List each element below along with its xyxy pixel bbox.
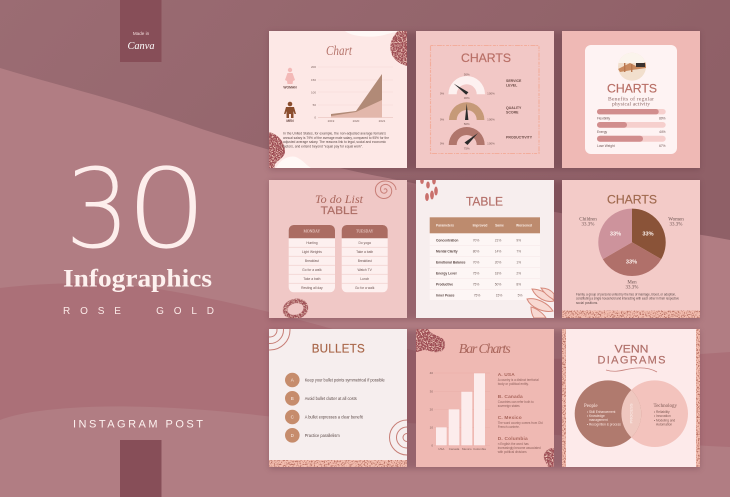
squiggle bbox=[606, 368, 657, 372]
bar chart: 40 bbox=[430, 371, 433, 375]
top ribbon bbox=[120, 0, 162, 62]
white corner bottom bbox=[276, 157, 311, 168]
glitter side right bbox=[696, 329, 700, 467]
bar: flexibility: Flexibility bbox=[597, 116, 611, 120]
paragraph: factors, and extend beyond "equal pay for equal work". bbox=[283, 144, 363, 148]
gauge: service level: 30% bbox=[464, 96, 470, 100]
table: Worsened bbox=[516, 224, 532, 228]
bar: energy: 44% bbox=[659, 130, 666, 134]
paragraph bbox=[283, 132, 389, 148]
table: 8% bbox=[516, 282, 521, 286]
paragraph: constituting a single household and interacting with each other in their respective bbox=[576, 297, 679, 301]
title: Chart bbox=[326, 44, 353, 59]
icon: man bbox=[284, 102, 296, 118]
bar chart: 30 bbox=[430, 389, 433, 393]
bullet B bbox=[285, 391, 357, 406]
big number 30 bbox=[65, 146, 208, 274]
heading: infographics: Infographics bbox=[63, 266, 212, 292]
bar chart bbox=[430, 371, 490, 451]
gauge: service level bbox=[440, 72, 495, 100]
item: colombia: increasingly become associated bbox=[498, 446, 541, 450]
bullet D bbox=[285, 428, 340, 443]
heading: TABLE bbox=[321, 205, 358, 217]
big number 30: 3 bbox=[65, 146, 130, 274]
rose blob bottom left bbox=[274, 164, 276, 167]
list: people: • Recognition & process bbox=[587, 422, 621, 426]
title: Bar Charts bbox=[459, 342, 511, 357]
area chart: 50 bbox=[313, 103, 316, 107]
label: children bbox=[579, 218, 597, 228]
gauge: quality score: 0% bbox=[440, 118, 444, 122]
bar: energy: Energy bbox=[597, 130, 608, 134]
title line one: VENN bbox=[614, 343, 649, 355]
venn circles bbox=[575, 380, 688, 447]
table: Emotional Balance bbox=[436, 260, 466, 264]
table: 14% bbox=[495, 249, 501, 253]
bar: energy bbox=[597, 122, 666, 134]
glitter blob top left bbox=[416, 329, 445, 352]
table: tuesday: Lunch bbox=[360, 277, 369, 281]
title: TABLE bbox=[466, 196, 503, 209]
table: Productive bbox=[436, 282, 453, 286]
table: tuesday: TUESDAY bbox=[356, 230, 374, 234]
paragraph: social positions. bbox=[576, 301, 598, 305]
item: mexico: C. Mexico bbox=[498, 415, 522, 421]
table: Parameters bbox=[436, 224, 454, 228]
pie chart bbox=[598, 209, 666, 276]
list: technology: • Reliability bbox=[654, 410, 670, 414]
paragraph: Family, a group of persons united by the ties of marriage, blood, or adoption, bbox=[576, 292, 676, 296]
table: 75% bbox=[473, 282, 479, 286]
table: tuesday: Watch TV bbox=[358, 268, 373, 272]
woman label: WOMAN bbox=[283, 86, 297, 90]
subheading: rose gold: ROSE GOLD bbox=[63, 306, 214, 317]
item: canada bbox=[498, 394, 534, 408]
bullet A: Keep your bullet points symmetrical if possible bbox=[305, 378, 385, 382]
glitter blob bottom right bbox=[544, 448, 554, 467]
bar chart: Canada bbox=[449, 447, 460, 451]
panel: progress bars bbox=[562, 31, 700, 168]
glitter blob bottom left bbox=[269, 132, 285, 168]
label: technology: Technology bbox=[654, 404, 678, 409]
table bbox=[430, 217, 540, 300]
table: Same bbox=[495, 224, 504, 228]
gauge: quality score bbox=[440, 102, 495, 126]
icon: woman bbox=[285, 68, 295, 84]
item: colombia: D. Columbia bbox=[498, 436, 528, 442]
label: children: Children bbox=[579, 218, 597, 222]
area chart: 2020 bbox=[353, 119, 360, 123]
item: usa bbox=[498, 372, 539, 386]
table: 80% bbox=[473, 249, 479, 253]
subtitle: Benefits of regular bbox=[608, 96, 654, 102]
paragraph: In the United States, for example, the non-adjusted average female's bbox=[283, 132, 386, 136]
table: monday: Take a bath bbox=[303, 277, 321, 281]
panel: gauges: LEVEL bbox=[506, 84, 518, 88]
script heading: To do List bbox=[315, 192, 364, 206]
label: quality score: QUALITY bbox=[506, 106, 522, 110]
panel: venn diagram bbox=[562, 329, 700, 467]
table: 7% bbox=[516, 249, 521, 253]
label: men: 33.3% bbox=[626, 286, 638, 290]
bar chart: 20 bbox=[430, 407, 433, 411]
pie chart: 33% bbox=[626, 260, 637, 266]
subtitle bbox=[608, 96, 654, 108]
men label: MEN bbox=[286, 119, 294, 123]
panel: pie chart bbox=[562, 180, 700, 318]
bar: lose weight: Lose Weight bbox=[597, 144, 615, 148]
area chart: 200 bbox=[311, 65, 316, 69]
table: Mental Clarity bbox=[436, 249, 458, 253]
table: tuesday: Do yoga bbox=[359, 241, 371, 245]
table: monday: Resting all day bbox=[301, 286, 323, 290]
gauge: productivity: 0% bbox=[440, 142, 444, 146]
item: mexico: French contrée. bbox=[498, 425, 520, 429]
item: colombia: n English the word has bbox=[498, 442, 529, 446]
table: 50% bbox=[495, 282, 501, 286]
area chart: 2021 bbox=[379, 119, 386, 123]
title line two: DIAGRAMS bbox=[598, 355, 666, 367]
item: usa: A country is a distinct territorial bbox=[498, 378, 539, 382]
canva logo text: Canva bbox=[128, 40, 155, 52]
bottom ribbon bbox=[120, 440, 162, 497]
label: men bbox=[626, 280, 638, 290]
gauge: service level: 50% bbox=[464, 72, 470, 76]
table: 70% bbox=[473, 260, 479, 264]
gauge: service level: 100% bbox=[487, 92, 495, 96]
label: productivity: PRODUCTIVITY bbox=[506, 136, 533, 140]
list: people: • Knowledge bbox=[587, 414, 605, 418]
item: colombia bbox=[498, 436, 541, 454]
bar: flexibility bbox=[597, 109, 666, 120]
label: children: 33.3% bbox=[582, 222, 594, 228]
label: service level: SERVICE bbox=[506, 79, 522, 83]
icon: spiral bbox=[375, 181, 396, 198]
big number 30: 0 bbox=[125, 146, 208, 274]
bar chart: Colombia bbox=[473, 447, 486, 451]
bar: lose weight bbox=[597, 136, 666, 148]
item: mexico bbox=[498, 415, 543, 429]
bullet B: Avoid bullet clutter at all costs bbox=[305, 396, 357, 401]
list: technology: • Modeling and bbox=[654, 418, 675, 422]
table: monday: MONDAY bbox=[304, 230, 321, 234]
item: usa: A. USA bbox=[498, 372, 515, 378]
area chart: 150 bbox=[311, 78, 316, 82]
table: 18% bbox=[495, 272, 501, 276]
table: 15% bbox=[496, 293, 502, 297]
label: people: People bbox=[584, 404, 598, 409]
label: men: Men bbox=[627, 280, 637, 286]
table: monday: Go for a walk bbox=[302, 268, 322, 272]
paragraph bbox=[576, 292, 679, 305]
glitter strip bbox=[269, 460, 407, 467]
bullet C: A bullet expresses a clear benefit bbox=[305, 414, 363, 420]
table: 21% bbox=[495, 238, 501, 242]
panel: area chart bbox=[269, 31, 407, 168]
gauge: quality score: 100% bbox=[487, 118, 495, 122]
bar: lose weight: 67% bbox=[659, 144, 666, 148]
list: technology bbox=[654, 410, 675, 426]
label: women bbox=[668, 218, 684, 228]
glitter frame bbox=[430, 46, 539, 154]
bullet B: B bbox=[291, 396, 294, 401]
table: Inner Peace bbox=[436, 293, 455, 297]
area chart: 100 bbox=[311, 90, 316, 94]
glitter side left bbox=[562, 329, 566, 467]
pie chart: 33% bbox=[610, 232, 621, 238]
bullet A: A bbox=[291, 378, 294, 383]
bar chart: USA bbox=[438, 447, 444, 451]
label: instagram post: INSTAGRAM POST bbox=[73, 418, 203, 430]
list: technology: • Innovation bbox=[654, 414, 671, 418]
icon: arcs bottom right bbox=[389, 420, 407, 456]
pie chart: 33% bbox=[642, 232, 654, 238]
panel: bullets bbox=[269, 329, 407, 467]
icon: leaf bbox=[527, 288, 554, 318]
bar chart: Mexico bbox=[462, 447, 472, 451]
gauge: service level: 0% bbox=[440, 92, 444, 96]
panel: to do list table bbox=[269, 180, 407, 319]
icon: petals bbox=[420, 178, 438, 201]
bar chart: 0 bbox=[431, 443, 433, 447]
photo circle bbox=[618, 52, 646, 82]
gauge: productivity: 75% bbox=[464, 146, 470, 150]
item: mexico: The word country comes from Old bbox=[498, 421, 543, 425]
area chart: 0 bbox=[314, 116, 316, 120]
table: 75% bbox=[473, 272, 479, 276]
table: 75% bbox=[474, 293, 480, 297]
table: monday: Hunting bbox=[306, 241, 318, 245]
paragraph: adjusted average salary. The reasons link to legal, social and economic bbox=[283, 140, 386, 144]
made in label: Made in bbox=[133, 31, 150, 36]
list: people: management bbox=[589, 418, 608, 422]
table: 2% bbox=[516, 272, 521, 276]
table: Improved bbox=[473, 224, 487, 228]
label: women: Women bbox=[668, 218, 684, 222]
card bbox=[585, 45, 677, 154]
table: monday: Breakfast bbox=[305, 259, 319, 263]
icon: arcs top left bbox=[269, 329, 290, 350]
table: 5% bbox=[518, 293, 522, 297]
table: Concentration bbox=[436, 238, 458, 242]
table: tuesday: Go for a walk bbox=[355, 286, 375, 290]
label: process: PROCESS bbox=[628, 403, 634, 424]
gauge: productivity: 100% bbox=[487, 142, 495, 146]
list: people bbox=[587, 410, 621, 426]
title: CHARTS bbox=[461, 52, 511, 65]
table: tuesday bbox=[342, 225, 388, 292]
subtitle: physical activity bbox=[612, 102, 650, 108]
panel: gauges: SCORE bbox=[506, 110, 519, 114]
list: technology: Automation bbox=[656, 422, 672, 426]
glitter blob top right bbox=[390, 31, 407, 66]
table: 9% bbox=[516, 238, 521, 242]
bullet A bbox=[285, 373, 385, 387]
white corner top bbox=[345, 31, 398, 37]
item: colombia: with political divisions bbox=[498, 450, 527, 454]
title: CHARTS bbox=[607, 83, 657, 96]
paragraph: annual salary is 79% of the average male salary, compared to 95% for the bbox=[283, 136, 389, 140]
bullet D: Practice parallelism bbox=[305, 433, 340, 438]
table: 1% bbox=[516, 260, 521, 264]
glitter ring bbox=[283, 299, 308, 319]
title: CHARTS bbox=[607, 193, 657, 206]
bullet D: D bbox=[291, 433, 295, 438]
gauge: productivity bbox=[440, 127, 495, 150]
area chart bbox=[311, 65, 393, 123]
table: 70% bbox=[473, 238, 479, 242]
item: canada: sovereign states bbox=[498, 404, 520, 408]
panel: gauges bbox=[416, 31, 554, 168]
table: tuesday: Breakfast bbox=[358, 259, 372, 263]
panel: bar chart bbox=[416, 329, 554, 467]
item: canada: Countries can refer both to bbox=[498, 400, 534, 404]
table: 20% bbox=[495, 260, 501, 264]
title: BULLETS bbox=[312, 342, 365, 355]
table: monday bbox=[289, 225, 335, 292]
bar: flexibility: 89% bbox=[659, 116, 666, 120]
label: women: 33.3% bbox=[670, 222, 682, 228]
glitter strip bbox=[562, 310, 700, 318]
item: usa: body or political entity. bbox=[498, 382, 529, 386]
panel: data table bbox=[416, 178, 554, 318]
bar chart: 10 bbox=[430, 425, 433, 429]
item: canada: B. Canada bbox=[498, 394, 523, 400]
bullet C bbox=[285, 410, 363, 424]
gauge: quality score: 50% bbox=[464, 122, 470, 126]
table: tuesday: Take a bath bbox=[356, 250, 373, 254]
table: monday: Light Weights bbox=[302, 250, 322, 254]
list: people: • Skill Enhancement bbox=[587, 410, 616, 414]
bullet C: C bbox=[291, 415, 295, 420]
table: Energy Level bbox=[436, 272, 457, 276]
area chart: 2019 bbox=[328, 119, 335, 123]
